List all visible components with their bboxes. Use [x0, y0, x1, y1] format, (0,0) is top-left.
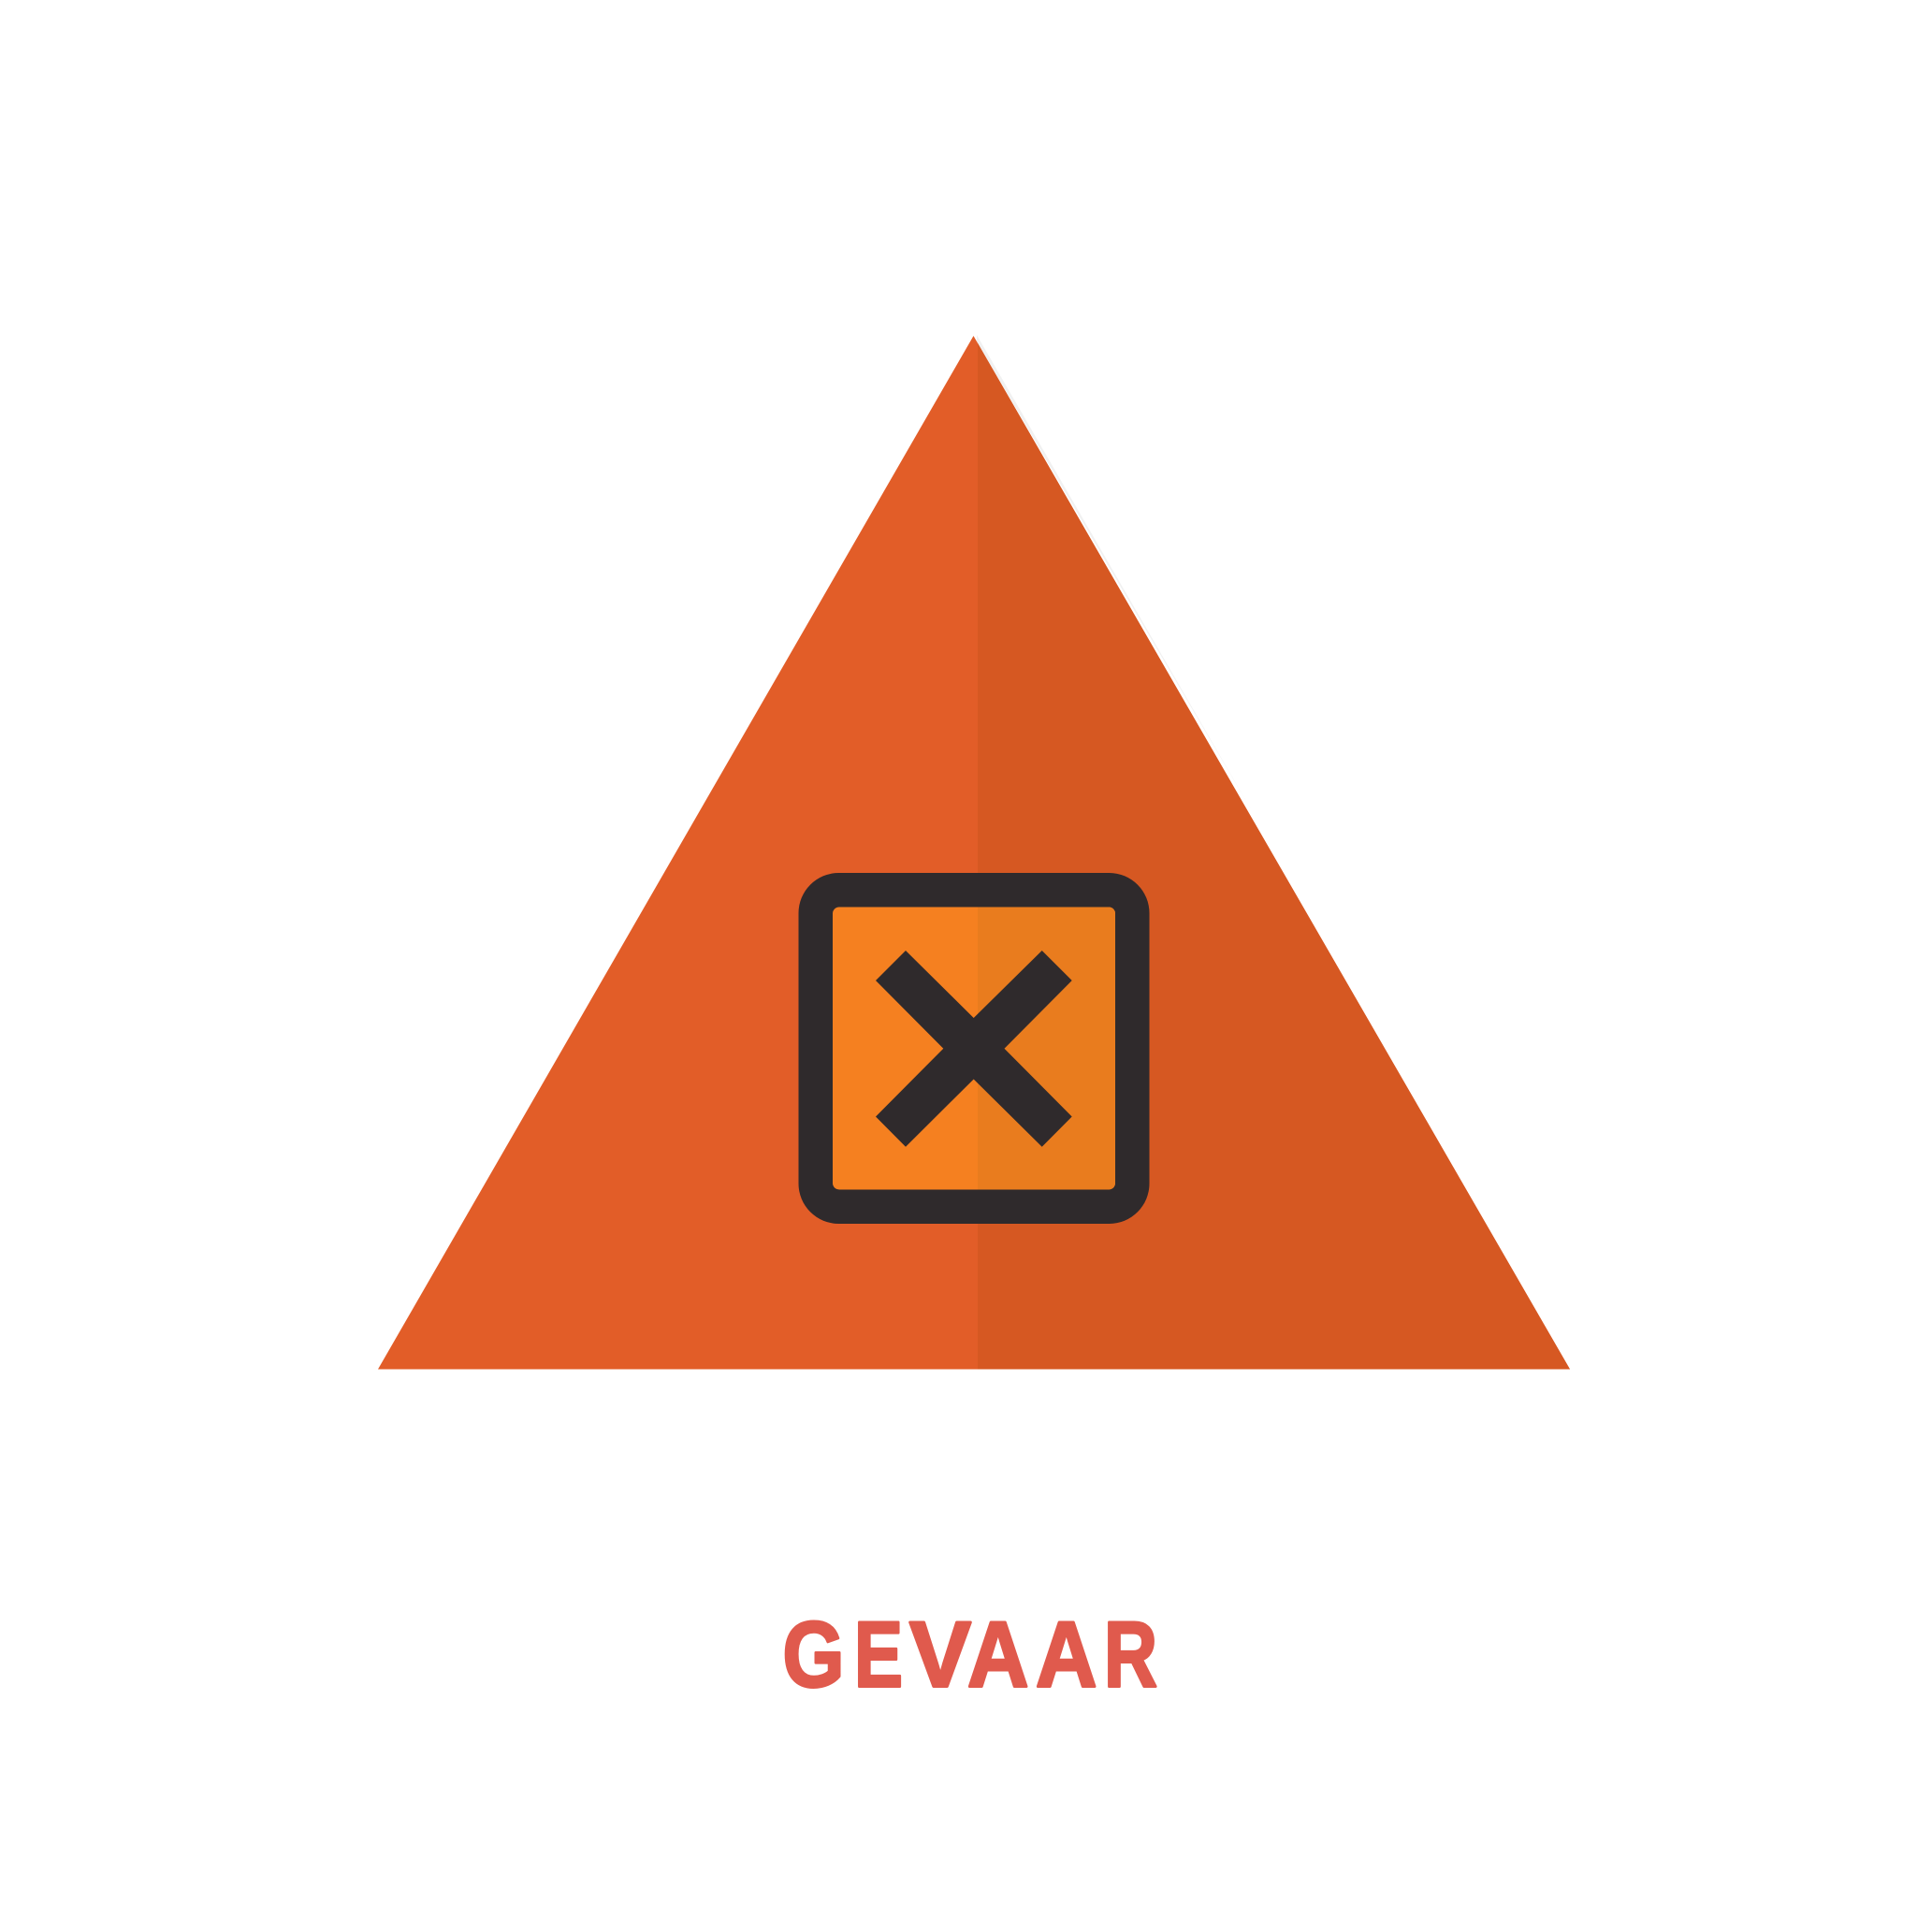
label: GEVAAR: G [782, 1602, 844, 1707]
box inner left [833, 908, 1115, 1190]
hazard sign [378, 335, 1570, 1370]
triangle: right shaded half [978, 343, 1570, 1370]
label: GEVAAR: A [1036, 1602, 1097, 1707]
label: GEVAAR: E [854, 1602, 903, 1707]
label: GEVAAR: V [909, 1602, 971, 1707]
box inner right shaded [978, 908, 1115, 1190]
box frame [799, 873, 1149, 1224]
label: GEVAAR: R [1104, 1602, 1157, 1707]
label: GEVAAR: A [967, 1602, 1029, 1707]
label: GEVAAR [782, 1602, 1157, 1707]
icon: cross [876, 951, 1072, 1147]
icon: box with cross [799, 873, 1149, 1224]
triangle: left half [378, 336, 1570, 1370]
